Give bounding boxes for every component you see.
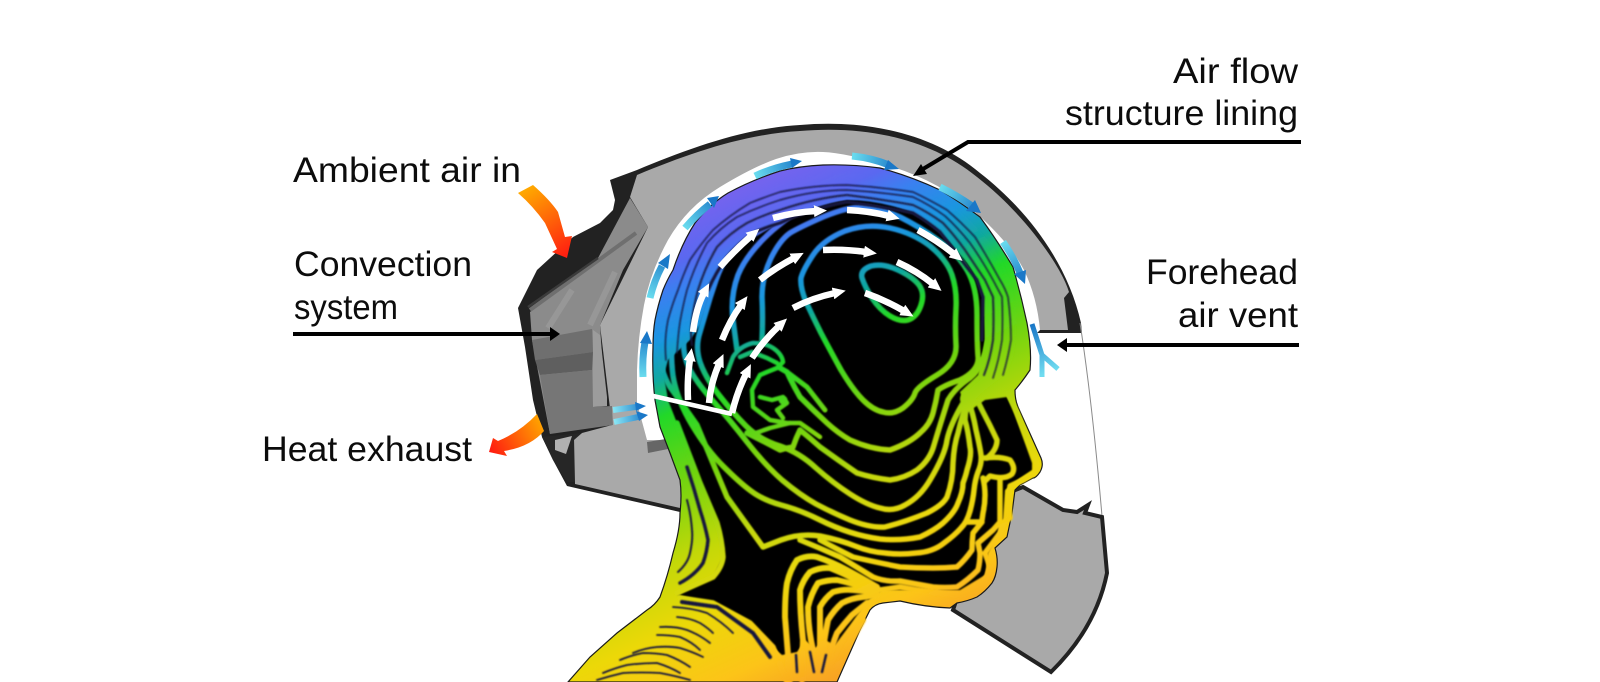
heat map contours	[597, 176, 1037, 682]
label: forehead air vent: Forehead	[1146, 253, 1298, 292]
label: heat exhaust: Heat exhaust	[262, 430, 472, 469]
contour lines	[660, 176, 1037, 682]
neck lines	[677, 423, 723, 593]
cyan lining arrows	[613, 156, 1026, 422]
arrow: convection system	[293, 327, 560, 341]
arrow: forehead air vent	[1057, 338, 1299, 352]
label: convection system	[294, 245, 472, 327]
label: convection system: Convection	[294, 245, 472, 284]
nose line	[1008, 393, 1037, 480]
helmet shell	[518, 124, 1082, 512]
jaw line running to back of head	[660, 320, 981, 554]
black interior	[664, 200, 1032, 655]
convection system	[528, 198, 648, 482]
visor edge	[1080, 323, 1102, 516]
label: air flow structure lining	[1065, 52, 1299, 133]
orange arrow: heat exhaust	[489, 414, 544, 456]
label: forehead air vent: air vent	[1178, 296, 1298, 335]
label: convection system: system	[294, 288, 398, 327]
white air flow arrows	[688, 210, 954, 413]
thin dark bands	[597, 185, 1011, 680]
label: air flow structure lining: Air flow	[1173, 52, 1299, 91]
lining foot	[647, 439, 668, 453]
arrow: structure lining	[913, 142, 1301, 176]
label: air flow structure lining: structure lining	[1065, 94, 1298, 133]
nose loop	[984, 457, 1014, 482]
structure lining	[637, 152, 1040, 500]
label: forehead air vent	[1146, 253, 1298, 335]
orange arrow: ambient air in	[518, 185, 572, 258]
white base line	[640, 393, 732, 414]
label: ambient air in: Ambient air in	[293, 151, 521, 190]
forehead vent arrow	[1032, 324, 1058, 377]
head silhouette	[568, 165, 1042, 682]
chin guard	[953, 487, 1107, 672]
ear	[727, 343, 820, 437]
